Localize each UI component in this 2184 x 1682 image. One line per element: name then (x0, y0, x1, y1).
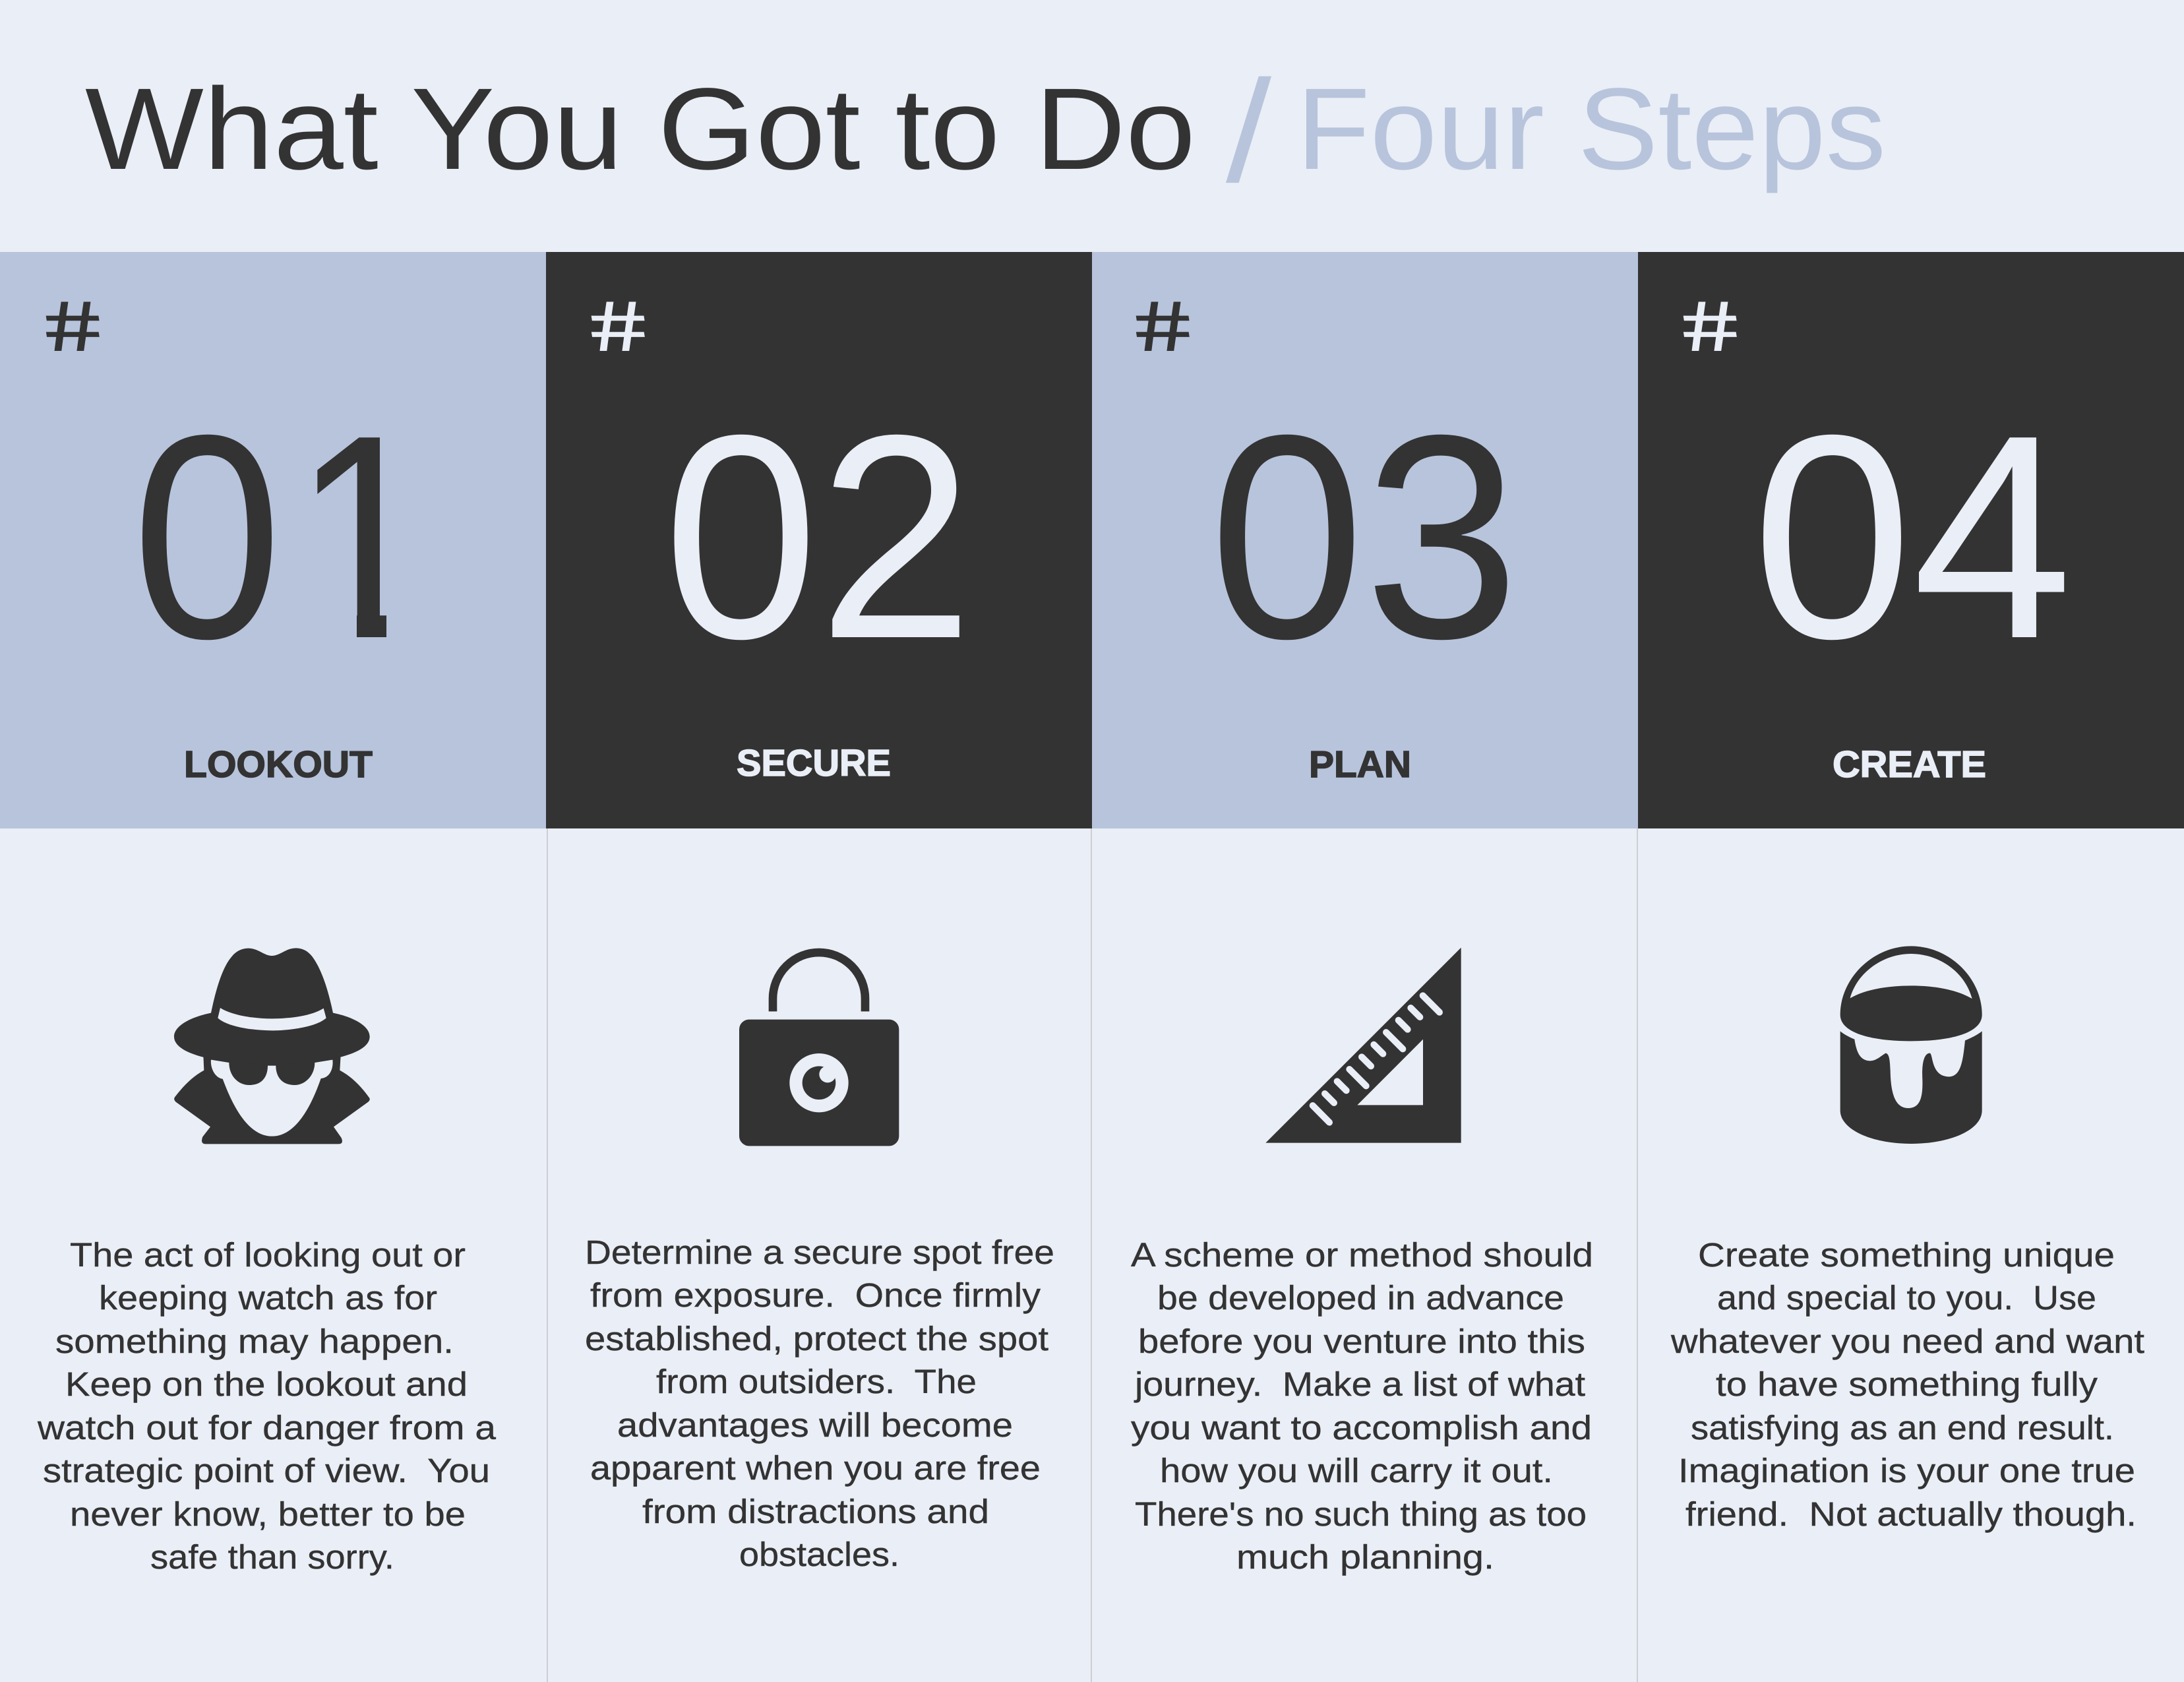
hash mark 02: # (585, 287, 652, 365)
text block: secure description: from distractions and (642, 1493, 989, 1530)
text block: lookout description: something may happen. (55, 1323, 454, 1360)
text block: lookout description (37, 1236, 497, 1576)
text block: lookout description: safe than sorry. (150, 1538, 394, 1576)
text block: plan description: you want to accomplish and (1131, 1409, 1592, 1447)
title: What You Got to Do (85, 65, 1196, 194)
label: secure: SECURE (737, 742, 891, 784)
text block: secure description: apparent when you are free (590, 1449, 1041, 1487)
label: create: CREATE (1833, 743, 1986, 786)
text block: secure description: obstacles. (739, 1536, 899, 1573)
icon: padlock with eye (739, 952, 899, 1146)
number 02: 02 (663, 375, 973, 699)
text block: plan description: much planning. (1236, 1538, 1494, 1576)
text block: create description: and special to you. Use (1717, 1279, 2096, 1317)
text block: plan description: before you venture into this (1138, 1323, 1585, 1360)
hash mark 04: # (1677, 287, 1744, 365)
text block: lookout description: strategic point of view. You (43, 1452, 490, 1489)
title: Four Steps (1296, 65, 1886, 194)
icon: set square ruler (1265, 948, 1461, 1143)
number 03: 03 (1209, 375, 1519, 699)
panel: step 04 create (1638, 252, 2184, 828)
text block: lookout description: never know, better to be (70, 1495, 466, 1533)
title (85, 50, 1886, 212)
text block: lookout description: watch out for danger from a (37, 1409, 497, 1447)
number 01 (132, 375, 452, 699)
text block: create description: satisfying as an end result. (1691, 1409, 2114, 1447)
panel: step 01 lookout (0, 252, 546, 828)
number 01: 0 (132, 375, 282, 699)
text block: secure description: Determine a secure spot free (585, 1233, 1054, 1271)
text block: secure description: from outsiders. The (656, 1363, 977, 1400)
icon: spy with hat and glasses (174, 948, 370, 1144)
text block: secure description (585, 1233, 1054, 1573)
label: plan: PLAN (1309, 743, 1411, 786)
icon: paint bucket (1840, 946, 1982, 1144)
text block: plan description: There's no such thing as too (1135, 1495, 1587, 1533)
text block: plan description: A scheme or method should (1131, 1236, 1593, 1274)
number 04: 04 (1752, 375, 2073, 699)
panel: step 02 secure (546, 252, 1092, 828)
text block: create description: friend. Not actually though. (1685, 1495, 2137, 1533)
text block: secure description: advantages will become (617, 1406, 1013, 1444)
text block: lookout description: keeping watch as for (99, 1279, 437, 1317)
text block: lookout description: The act of looking out or (70, 1236, 466, 1274)
panel: step 03 plan (1092, 252, 1638, 828)
text block: plan description (1131, 1236, 1593, 1576)
hash mark 03: # (1130, 287, 1196, 365)
text block: secure description: from exposure. Once firmly (590, 1276, 1041, 1314)
text block: create description: Create something unique (1698, 1236, 2115, 1274)
label: lookout: LOOKOUT (184, 743, 373, 786)
text block: create description: whatever you need and want (1670, 1323, 2144, 1360)
number 01: 1 (293, 375, 435, 699)
text block: lookout description: Keep on the lookout and (65, 1365, 468, 1403)
text block: create description (1670, 1236, 2144, 1533)
hash mark 01: # (40, 287, 106, 365)
title: / (1226, 50, 1272, 212)
text block: plan description: be developed in advance (1157, 1279, 1564, 1317)
text block: secure description: established, protect the spot (585, 1320, 1048, 1357)
text block: create description: to have something fully (1716, 1365, 2098, 1403)
text block: plan description: journey. Make a list of what (1134, 1365, 1585, 1403)
text block: plan description: how you will carry it out. (1160, 1452, 1553, 1489)
text block: create description: Imagination is your one true (1678, 1452, 2135, 1489)
